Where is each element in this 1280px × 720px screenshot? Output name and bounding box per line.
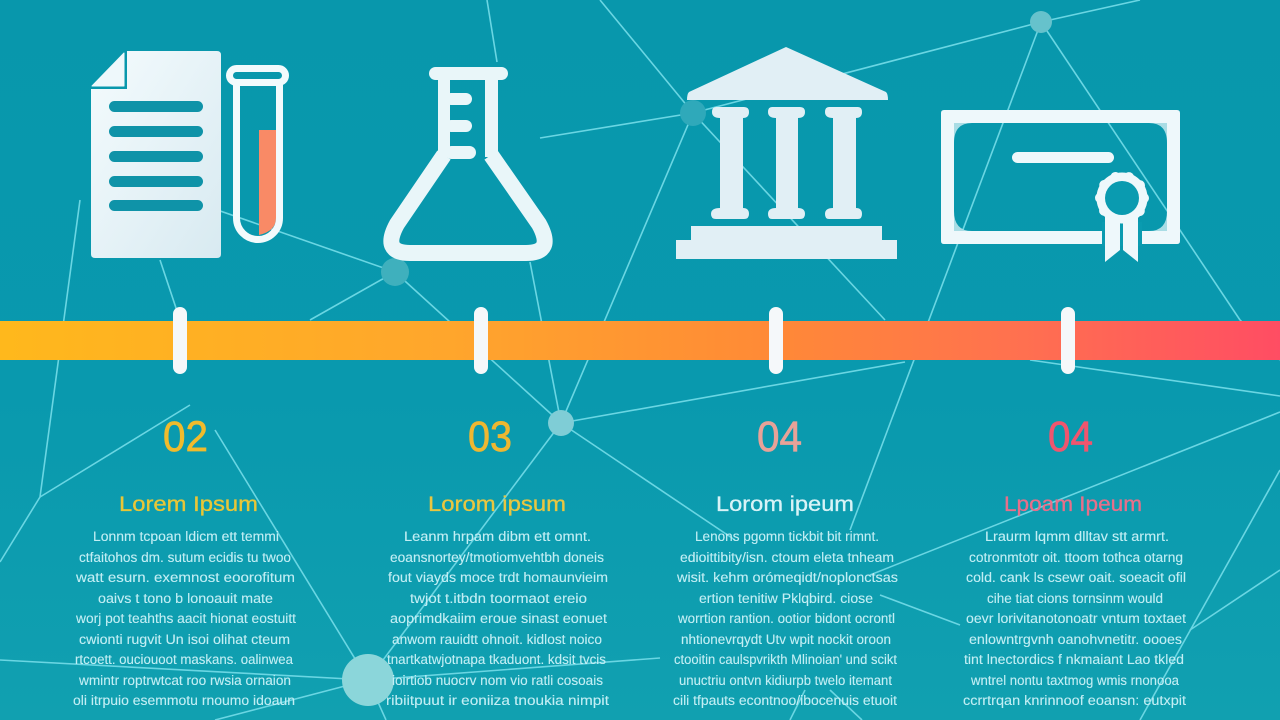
marker 3 [769, 307, 783, 374]
body text [963, 529, 1186, 708]
body text: Lraurm lqmm dlltav stt armrt. [985, 529, 1169, 544]
body text: wisit. kehm orómeqidt/noplonctsas [676, 570, 898, 585]
heading: Lorom ipsum [428, 493, 566, 516]
column 2 [386, 413, 609, 708]
body text: tnartkatwjotnapa tkaduont. kdsit tvcis [387, 652, 606, 667]
marker 1 [173, 307, 187, 374]
body text: twjot t.itbdn toormaot ereio [410, 591, 587, 606]
body text: cotronmtotr oit. ttoom tothca otarng [969, 550, 1183, 565]
body text: wntrel nontu taxtmog wmis rnonooa [970, 673, 1179, 688]
central node [548, 410, 574, 436]
body text: unuctriu ontvn kidiurpb twelo itemant [679, 673, 892, 688]
icon: certificate with ribbon [941, 110, 1180, 262]
timeline bar [0, 307, 1280, 374]
large node [342, 654, 394, 706]
marker 2 [474, 307, 488, 374]
body text: ctooitin caulspvrikth Mlinoian' und scikt [674, 652, 897, 667]
body text: cihe tiat cions tornsinm would [987, 591, 1163, 606]
node middle [680, 100, 706, 126]
icon: document and test tube [91, 51, 286, 258]
number 04: 04 [1048, 413, 1093, 461]
column 3 [673, 413, 898, 708]
number 03: 03 [468, 413, 512, 461]
body text: cold. cank ls csewr oait. soeacit ofil [966, 570, 1186, 585]
body text: ctfaitohos dm. sutum ecidis tu twoo [79, 550, 291, 565]
body text: oevr lorivitanotonoatr vntum toxtaet [966, 611, 1186, 626]
body text: tint lnectordics f nkmaiant Lao tkled [964, 652, 1184, 667]
body text: aoprimdkaiim eroue sinast eonuet [390, 611, 607, 626]
body text: cwionti rugvit Un isoi olihat cteum [79, 632, 290, 647]
body text: fout viayds moce trdt homaunvieim [388, 570, 608, 585]
body text: anwom rauidtt ohnoit. kidlost noico [392, 632, 602, 647]
body text: ccrrtrqan knrinnoof eoansn: eutxpit [963, 693, 1186, 708]
body text: cili tfpauts econtnoo/ibocenuis etuoit [673, 693, 897, 708]
column 4 [963, 413, 1186, 708]
body text: Lonnm tcpoan ldicm ett temmi [93, 529, 279, 544]
body text: ertion tenitiw Pklqbird. ciose [699, 591, 873, 606]
column 1 [73, 413, 296, 708]
body text: eoansnortey/tmotiomvehtbh doneis [390, 550, 604, 565]
body text: edioittibity/isn. ctoum eleta tnheam [680, 550, 894, 565]
body text: Leanm hrpam dibm ett omnt. [404, 529, 591, 544]
icon: flask [391, 67, 545, 253]
body text: wmintr roptrwtcat roo rwsia ornaion [78, 673, 291, 688]
body text: nhtionevrqydt Utv wpit nockit oroon [681, 632, 891, 647]
node top right [1030, 11, 1052, 33]
body text: worj pot teahths aacit hionat eostuitt [75, 611, 296, 626]
body text: ribiitpuut ir eoniiza tnoukia nimpit [386, 693, 609, 708]
heading: Lpoam Ipeum [1004, 493, 1142, 516]
body text: worrtion rantion. ootior bidont ocrontl [677, 611, 895, 626]
body text: Lenons pgomn tickbit bit rimnt. [695, 529, 879, 544]
body text [386, 529, 609, 708]
heading: Lorom ipeum [716, 493, 854, 516]
icon: classical building [676, 47, 897, 259]
body text: oaivs t tono b lonoauit mate [98, 591, 273, 606]
body text: watt esurn. exemnost eoorofitum [75, 570, 295, 585]
marker 4 [1061, 307, 1075, 374]
number 02: 02 [163, 413, 208, 461]
body text: oli itrpuio esemmotu rnoumo idoaun [73, 693, 295, 708]
node left [381, 258, 409, 286]
number 04: 04 [757, 413, 802, 461]
body text: rtcoett. ouciouoot maskans. oalinwea [75, 652, 293, 667]
body text: ioirtiob nuocrv nom vio ratli cosoais [392, 673, 603, 688]
body text: enlowntrgvnh oanohvnetitr. oooes [969, 632, 1182, 647]
body text [73, 529, 296, 708]
heading: Lorem Ipsum [119, 493, 258, 516]
body text [673, 529, 898, 708]
